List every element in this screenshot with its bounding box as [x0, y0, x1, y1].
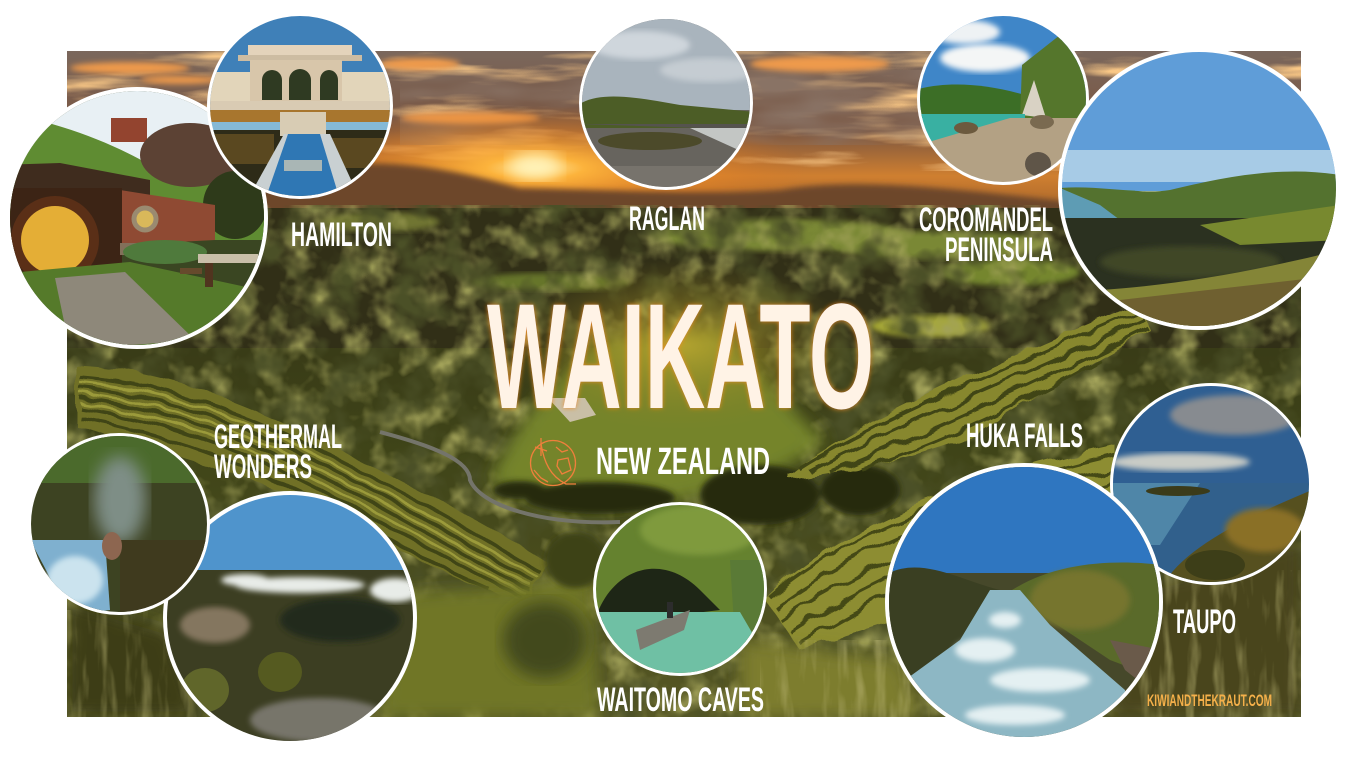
label: Hamilton: HAMILTON — [291, 216, 392, 254]
label: Coromandel Peninsula: COROMANDEL — [919, 201, 1053, 239]
photo circle: Coromandel beach — [915, 10, 1092, 190]
central meadow — [490, 330, 825, 510]
photo circle: Raglan beach — [579, 19, 753, 190]
left terraced hill — [75, 365, 548, 600]
photo circle: Hamilton Gardens — [205, 12, 395, 200]
label: Geothermal Wonders: GEOTHERMAL — [214, 418, 342, 456]
label: Geothermal Wonders — [214, 418, 342, 486]
forest texture — [67, 205, 1301, 717]
label: Coromandel Peninsula: PENINSULA — [945, 231, 1053, 269]
label: Taupo: TAUPO — [1173, 603, 1236, 641]
photo circle: Lake Taupo — [1110, 383, 1312, 590]
background landscape photo — [67, 51, 1301, 717]
subtitle: NEW ZEALAND: NEW ZEALAND — [596, 441, 770, 483]
foreground tussock grass — [67, 600, 200, 717]
photo circle: Wairakei geothermal terraces — [163, 491, 420, 750]
photo circle: hot pool waterfall — [28, 433, 210, 615]
distant ridge — [266, 160, 1060, 208]
right lower terraced hill — [765, 445, 1115, 650]
label: Waitomo Caves: WAITOMO CAVES — [597, 681, 764, 719]
photo circle: Waitomo Caves — [592, 500, 768, 680]
upper pasture band — [67, 208, 1301, 348]
label: Huka Falls: HUKA FALLS — [966, 417, 1083, 455]
trees below meadow — [494, 465, 900, 525]
road — [380, 432, 620, 522]
photo circle: Coromandel hills view — [1055, 46, 1345, 330]
label: Geothermal Wonders: WONDERS — [214, 448, 312, 486]
foreground meadow — [380, 565, 600, 717]
farm buildings — [548, 398, 596, 422]
credit: website: KIWIANDTHEKRAUT.COM — [1147, 691, 1272, 710]
photo circle: Huka Falls — [885, 463, 1163, 753]
right upper terraced hill — [790, 302, 1150, 480]
sunset sky — [67, 51, 1301, 204]
title: WAIKATO: WAIKATO — [487, 272, 874, 440]
label: Coromandel Peninsula — [919, 201, 1053, 269]
photo circle: Hobbiton hobbit hole — [0, 85, 270, 355]
label: Raglan: RAGLAN — [629, 200, 705, 238]
icon: globe with plane — [530, 438, 576, 486]
